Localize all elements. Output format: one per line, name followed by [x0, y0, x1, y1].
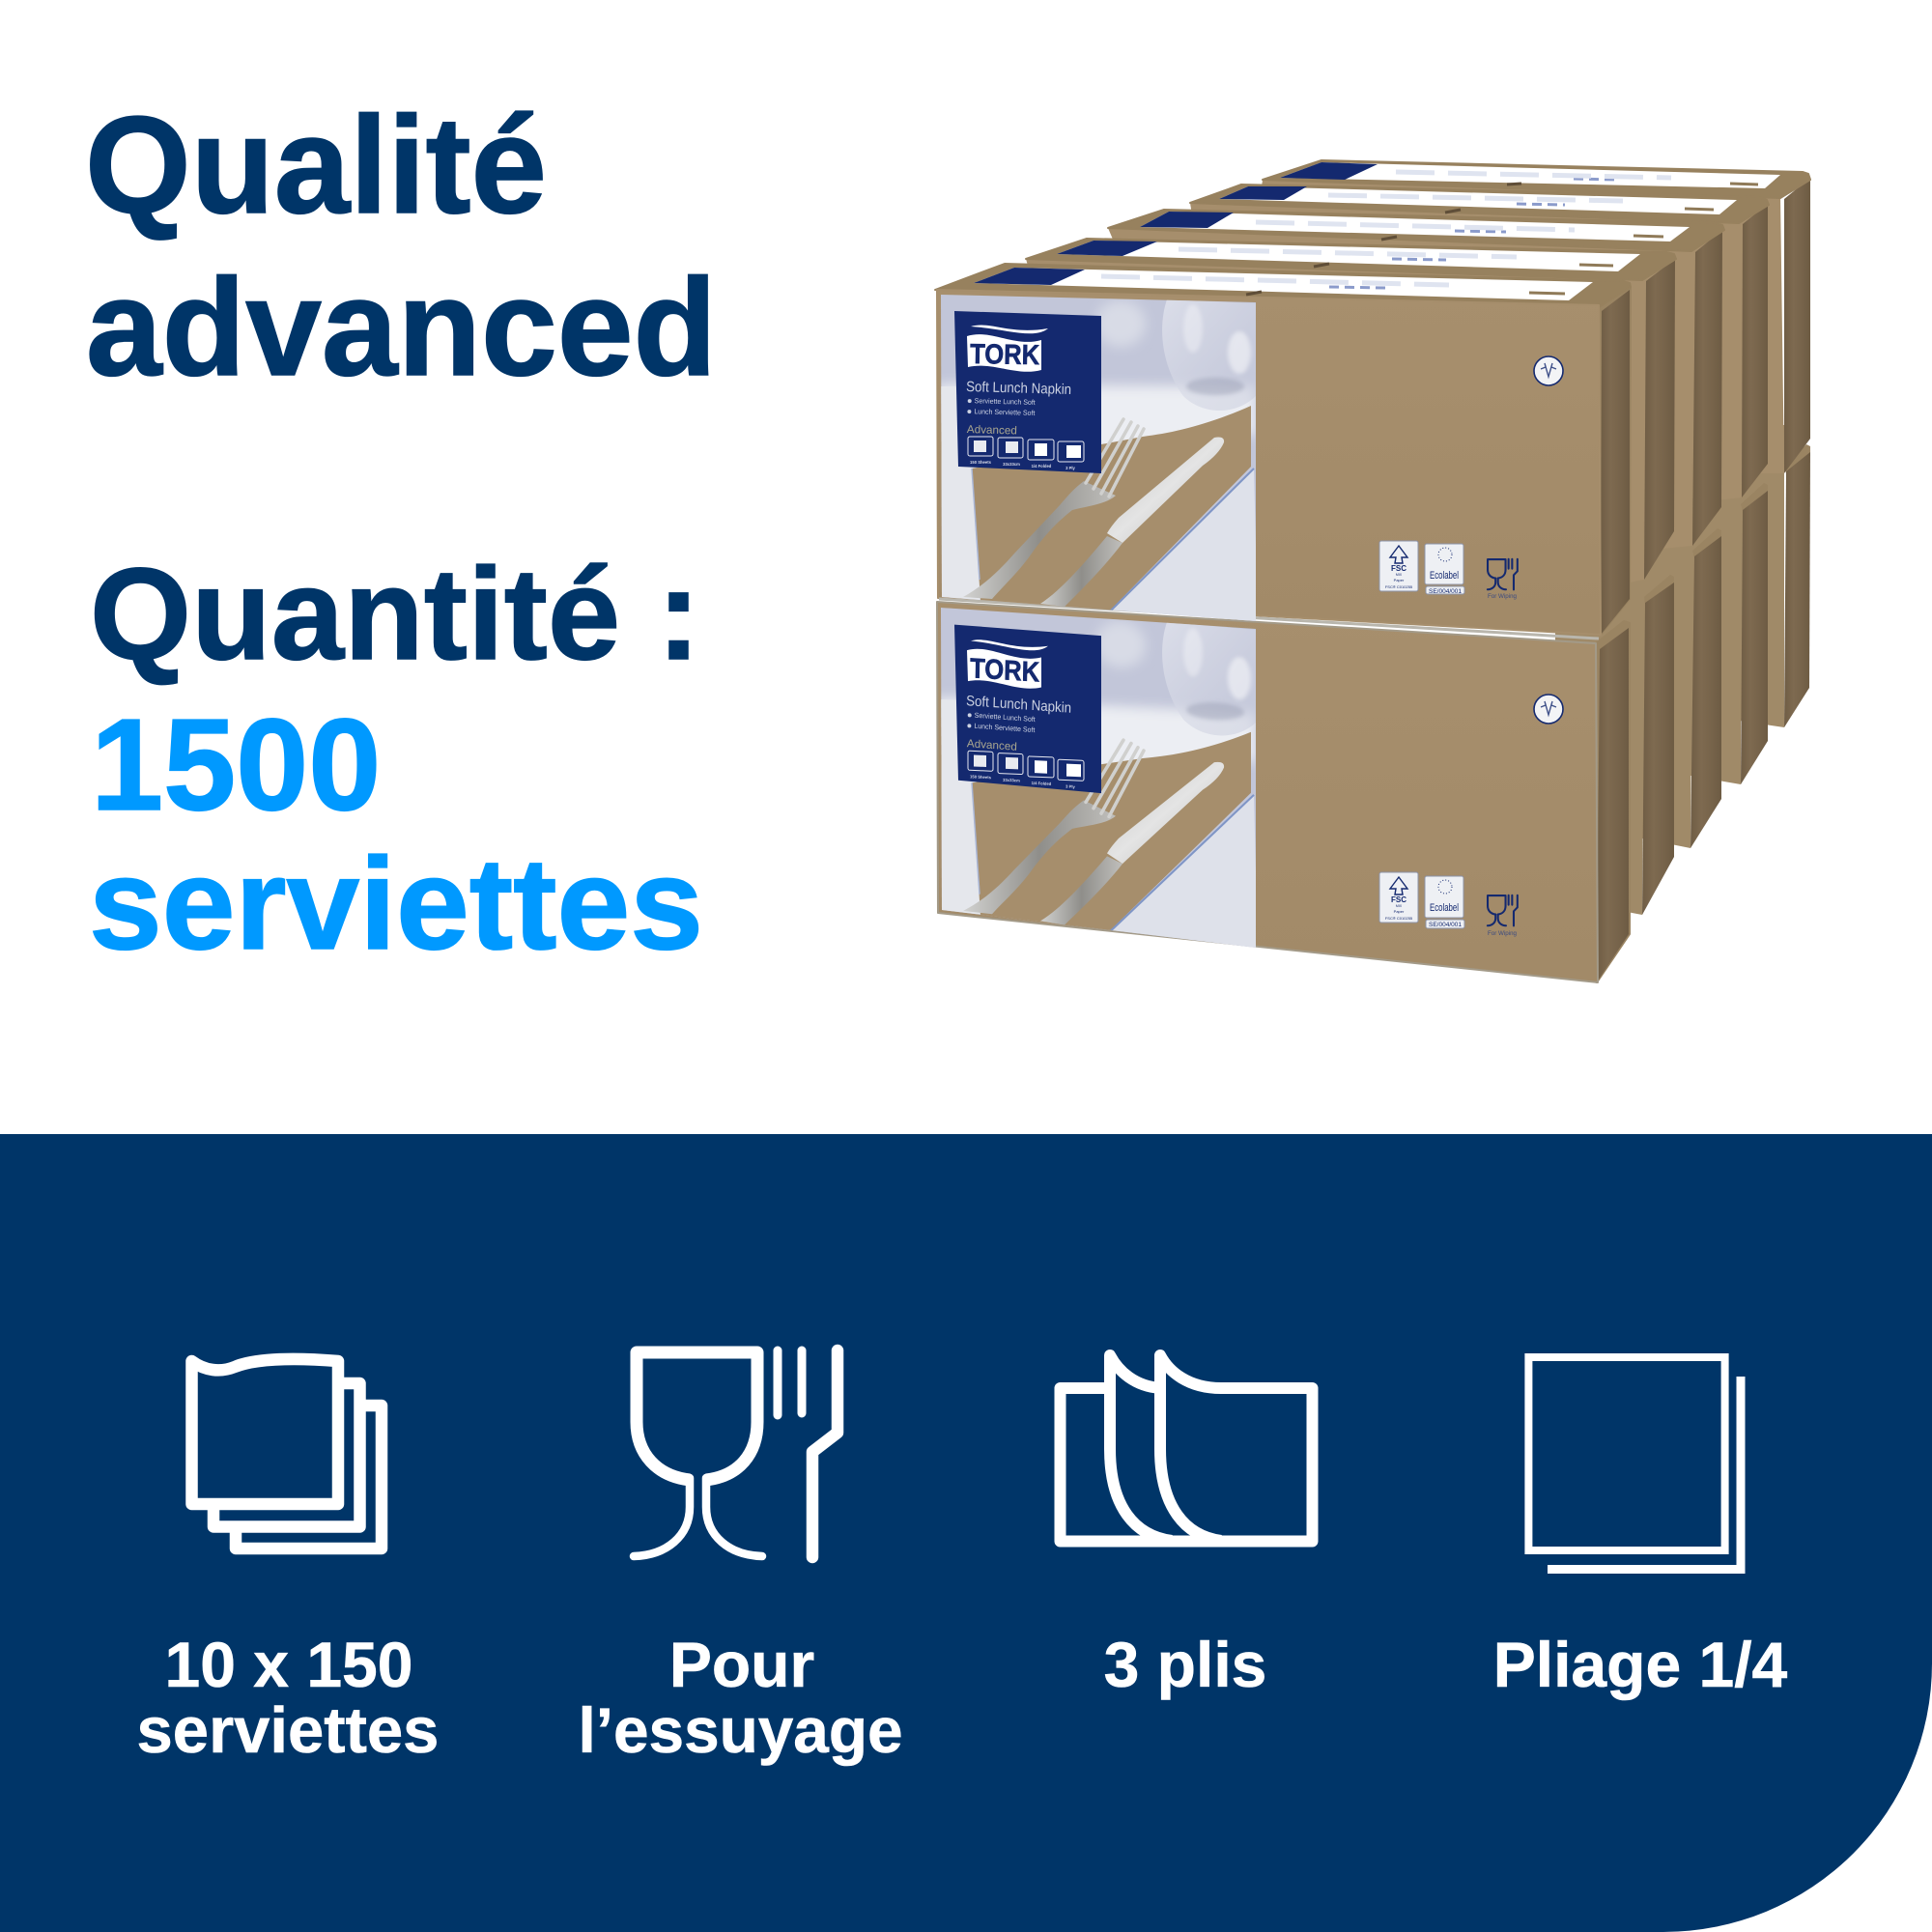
- picture panel: lower box: [937, 603, 1261, 954]
- certification marks: lower box: [1379, 872, 1518, 937]
- label: 10 x 150 serviettes: 10 x 150: [165, 1629, 412, 1700]
- FSC label: MIX: [1396, 904, 1403, 908]
- fork: [963, 419, 1144, 599]
- product name text: Lunch Serviette Soft: [974, 722, 1036, 734]
- Ecolabel: [1425, 544, 1464, 595]
- Tork logo: TORK: [970, 653, 1039, 689]
- FSC label: FSC: [1391, 895, 1406, 904]
- pictogram captions: 3 Ply: [1065, 784, 1076, 789]
- Tork logo: [967, 326, 1048, 372]
- certification marks: upper box: [1379, 541, 1518, 600]
- knife: [1040, 438, 1224, 607]
- pictogram captions: 150 Sheets: [970, 774, 992, 780]
- Ecolabel: SE/004/001: [1429, 588, 1462, 595]
- product name text: Advanced: [967, 424, 1017, 437]
- pictogram captions: [970, 460, 1076, 470]
- FSC label: FSC® C010255: [1385, 584, 1413, 589]
- pictogram captions: [970, 774, 1076, 789]
- label: 3 plis: 3 plis: [1104, 1629, 1266, 1700]
- Ecolabel: Ecolabel: [1430, 902, 1459, 914]
- product name text: [965, 693, 1071, 757]
- product label: [954, 625, 1101, 793]
- badge: lower box: [1534, 695, 1563, 724]
- heading: quality: Qualité: [85, 89, 547, 242]
- pictogram captions: 3 Ply: [1065, 466, 1076, 470]
- fork: [963, 733, 1144, 921]
- heading: quality: advanced: [86, 251, 717, 405]
- heading: 1500 napkins: [89, 692, 703, 977]
- pack pictograms: [968, 751, 1084, 781]
- product name text: Advanced: [967, 738, 1017, 753]
- product name text: Serviette Lunch Soft: [975, 396, 1036, 407]
- caption: For Wiping: [1488, 593, 1517, 600]
- heading: quantity: Quantité :: [90, 541, 700, 687]
- heading: 1500 napkins: serviettes: [89, 831, 703, 977]
- badge: upper box: [1534, 356, 1563, 385]
- label: 10 x 150 serviettes: serviettes: [137, 1694, 439, 1767]
- carton row 4: [1190, 185, 1769, 784]
- heading: 1500 napkins: 1500: [91, 692, 381, 838]
- pictogram captions: 150 Sheets: [970, 460, 992, 465]
- Ecolabel: Ecolabel: [1430, 570, 1459, 582]
- product label: [954, 311, 1101, 473]
- label: pour l'essuyage: [578, 1629, 902, 1766]
- FSC label: [1379, 541, 1418, 591]
- Tork logo: [967, 639, 1048, 690]
- carton row 2: [1026, 239, 1676, 915]
- carton: upper front face: [937, 290, 1601, 635]
- Ecolabel: SE/004/001: [1429, 922, 1462, 928]
- pictogram captions: 1/4 Folded: [1032, 781, 1052, 786]
- caption: For Wiping: [1488, 930, 1517, 937]
- pictogram captions: 1/4 Folded: [1032, 464, 1052, 469]
- product name text: Lunch Serviette Soft: [974, 407, 1036, 417]
- knife: [1040, 754, 1224, 932]
- FSC label: MIX: [1396, 573, 1403, 577]
- pictogram captions: 33x33cm: [1003, 778, 1020, 783]
- FSC label: [1379, 872, 1418, 923]
- food-safe mark: [1488, 895, 1518, 925]
- label: pour l'essuyage: l’essuyage: [578, 1694, 902, 1766]
- FSC label: FSC: [1391, 564, 1406, 573]
- picture panel: upper box: [937, 290, 1261, 628]
- product name text: Serviette Lunch Soft: [975, 711, 1036, 724]
- FSC label: Paper: [1394, 578, 1405, 582]
- FSC label: FSC® C010255: [1385, 916, 1413, 921]
- label: pliage 1/4: Pliage 1/4: [1493, 1629, 1788, 1700]
- carton row 1: top face with label: [935, 264, 1631, 307]
- Ecolabel: [1425, 876, 1464, 928]
- seam line between boxes: [939, 599, 1599, 639]
- heading: quality: [85, 89, 717, 405]
- carton row 1: lower box side: [1596, 621, 1630, 982]
- label: pour l'essuyage: Pour: [669, 1629, 814, 1700]
- navy feature panel: [0, 1134, 1932, 1932]
- icon: three plies: [1061, 1355, 1312, 1542]
- product name text: Soft Lunch Napkin: [966, 379, 1071, 398]
- icon: quarter fold: [1528, 1357, 1741, 1569]
- Tork logo: TORK: [970, 339, 1039, 371]
- pack pictograms: [968, 437, 1084, 462]
- carton row 5 (back): [1256, 160, 1810, 727]
- FSC label: Paper: [1394, 909, 1405, 914]
- carton: lower front face: [937, 602, 1598, 982]
- product image: stacked cartons: [935, 160, 1810, 982]
- icon: stack of napkins: [191, 1359, 382, 1548]
- carton row 3: [1108, 210, 1724, 848]
- pictogram captions: 33x33cm: [1003, 462, 1020, 467]
- food-safe mark: [1488, 559, 1518, 589]
- product name text: [965, 379, 1071, 439]
- carton row 1: upper box side: [1599, 283, 1631, 635]
- icon: glass and fork: [634, 1350, 838, 1557]
- product name text: Soft Lunch Napkin: [966, 693, 1071, 717]
- label: 10 x 150 serviettes: [137, 1629, 439, 1767]
